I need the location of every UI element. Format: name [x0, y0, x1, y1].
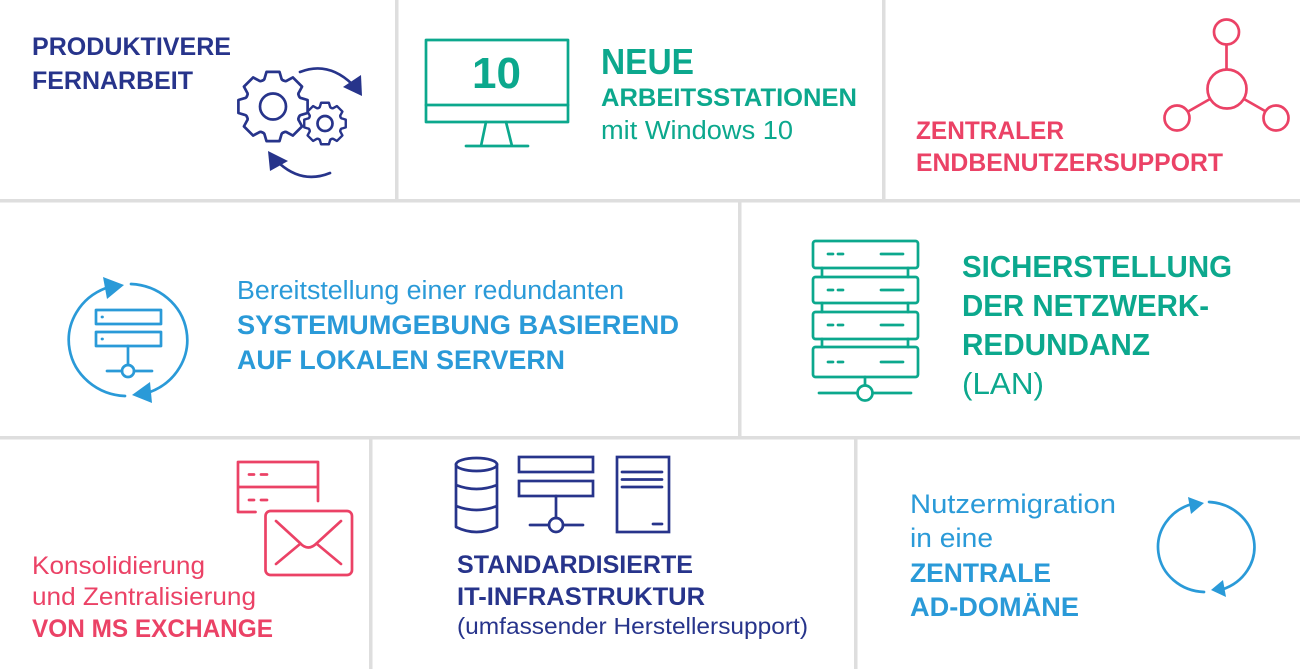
- heading: zentraler Endbenutzersupport: ENDBENUTZERSUPPORT: [916, 149, 1223, 177]
- icon: database: [456, 458, 497, 532]
- panel: neue Arbeitsstationen: [426, 40, 857, 146]
- icon: circular arrows: [1158, 497, 1254, 597]
- text: Konsolidierung von MS Exchange: [32, 552, 273, 643]
- text: Bereitstellung einer redundanten Systemumgebung: SYSTEMUMGEBUNG BASIEREND: [237, 310, 679, 340]
- icon: server with circular arrows: [69, 277, 187, 403]
- icon: monitor with number 10: [426, 40, 568, 146]
- text: Konsolidierung von MS Exchange: VON MS EXCHANGE: [32, 615, 273, 643]
- text: Nutzermigration in eine zentrale AD-Domäne: in eine: [910, 523, 993, 553]
- icon: server with envelope: [238, 462, 352, 575]
- heading: neue Arbeitsstationen mit Windows 10: ARBEITSSTATIONEN: [601, 84, 857, 112]
- panel: standardisierte IT-Infrastruktur: [456, 457, 808, 639]
- text: Bereitstellung einer redundanten Systemumgebung: AUF LOKALEN SERVERN: [237, 345, 565, 375]
- heading: Sicherstellung der Netzwerk-Redundanz (LAN): [962, 250, 1232, 401]
- icon: hub network: [1164, 20, 1288, 130]
- icon: gears with arrows: [238, 68, 362, 177]
- heading: neue Arbeitsstationen mit Windows 10: NEUE: [601, 41, 694, 82]
- icon: server network: [519, 457, 593, 532]
- heading: Sicherstellung der Netzwerk-Redundanz (LAN): (LAN): [962, 366, 1044, 401]
- heading: neue Arbeitsstationen mit Windows 10: mit Windows 10: [601, 117, 793, 145]
- panel: MS Exchange: [32, 462, 352, 643]
- heading: produktivere Fernarbeit: [32, 33, 231, 95]
- panel: Nutzermigration: [910, 489, 1254, 622]
- panel: redundante Systemumgebung: [69, 277, 679, 403]
- text: standardisierte IT-Infrastruktur: (umfassender Herstellersupport): [457, 613, 808, 639]
- text: Bereitstellung einer redundanten Systemumgebung: Bereitstellung einer redundanten: [237, 277, 624, 305]
- text: Bereitstellung einer redundanten Systemumgebung: [237, 277, 679, 375]
- text: Konsolidierung von MS Exchange: Konsolidierung: [32, 552, 205, 580]
- heading: zentraler Endbenutzersupport: [916, 117, 1223, 177]
- text: Nutzermigration in eine zentrale AD-Domäne: ZENTRALE: [910, 558, 1051, 588]
- heading: zentraler Endbenutzersupport: ZENTRALER: [916, 117, 1064, 145]
- panel: zentraler Endbenutzersupport: [916, 20, 1288, 177]
- heading: produktivere Fernarbeit: PRODUKTIVERE: [32, 33, 231, 61]
- panel: produktivere Fernarbeit: [32, 33, 362, 177]
- text: Konsolidierung von MS Exchange: und Zentralisierung: [32, 583, 256, 611]
- text: standardisierte IT-Infrastruktur: STANDARDISIERTE: [457, 551, 693, 579]
- text: Nutzermigration in eine zentrale AD-Domäne: [910, 489, 1116, 622]
- text: Nutzermigration in eine zentrale AD-Domäne: AD-DOMÄNE: [910, 592, 1079, 622]
- text: standardisierte IT-Infrastruktur: [457, 551, 808, 639]
- text: Nutzermigration in eine zentrale AD-Domäne: Nutzermigration: [910, 489, 1116, 519]
- heading: neue Arbeitsstationen mit Windows 10: [601, 41, 857, 145]
- icon: document: [617, 457, 669, 532]
- icon: monitor with number 10: 10: [472, 49, 521, 98]
- heading: Sicherstellung der Netzwerk-Redundanz (LAN): REDUNDANZ: [962, 328, 1150, 362]
- text: standardisierte IT-Infrastruktur: IT-INFRASTRUKTUR: [457, 583, 705, 611]
- heading: Sicherstellung der Netzwerk-Redundanz (LAN): SICHERSTELLUNG: [962, 250, 1232, 284]
- panel: Netzwerk-Redundanz: [813, 241, 1232, 401]
- heading: Sicherstellung der Netzwerk-Redundanz (LAN): DER NETZWERK-: [962, 289, 1209, 323]
- icon: server rack: [813, 241, 918, 400]
- heading: produktivere Fernarbeit: FERNARBEIT: [32, 67, 193, 95]
